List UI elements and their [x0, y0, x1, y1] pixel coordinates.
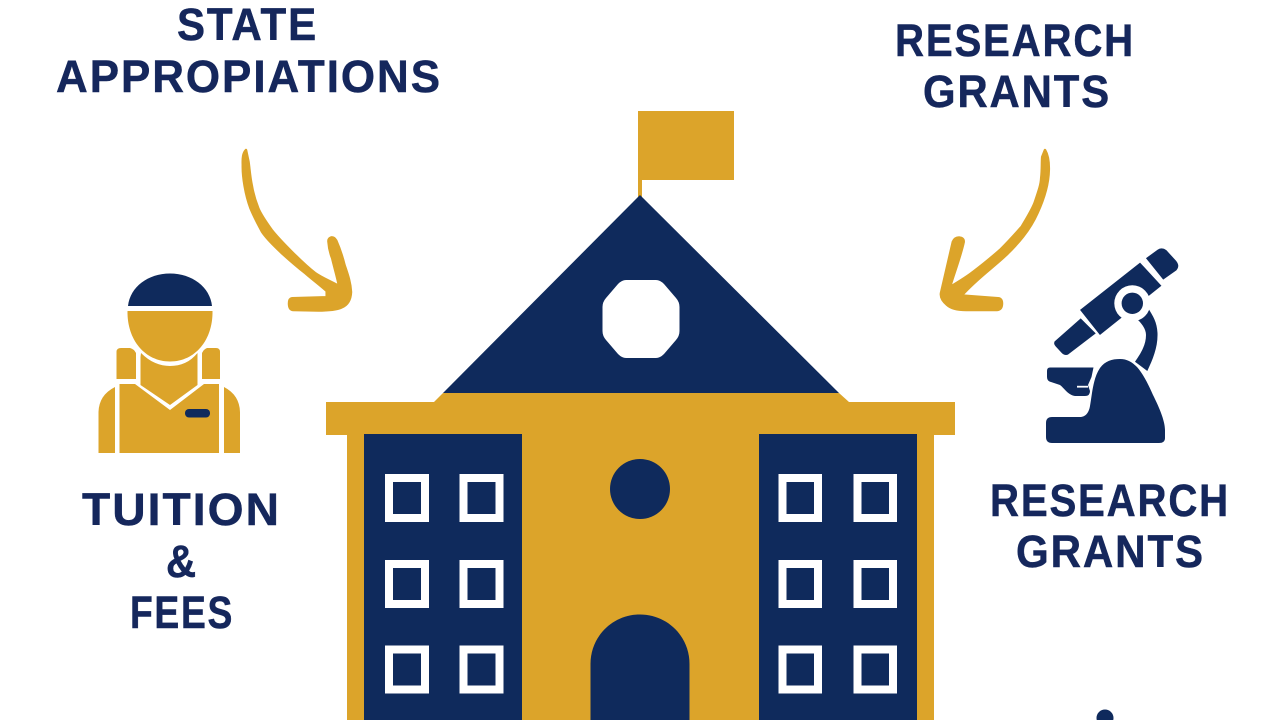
flag	[638, 111, 734, 197]
left wing	[364, 434, 522, 720]
building: university hall	[326, 111, 955, 720]
arm	[1135, 308, 1158, 371]
right wing	[759, 434, 917, 720]
arrow: left curved arrow	[243, 150, 351, 310]
eyepiece	[1147, 249, 1178, 279]
arrow: right curved arrow	[941, 150, 1049, 310]
heading: tuition and fees: TUITION	[82, 484, 281, 535]
cornice and facade	[326, 393, 955, 720]
roof	[443, 195, 839, 393]
badge	[185, 409, 210, 418]
heading: research grants right: GRANTS	[1016, 526, 1205, 577]
heading: state appropriations: APPROPIATIONS	[56, 51, 442, 102]
heading: state appropriations: STATE	[177, 0, 318, 50]
cap	[128, 274, 212, 306]
face	[127, 311, 213, 362]
torso	[120, 384, 219, 453]
icon: microscope	[1046, 249, 1178, 720]
round window	[610, 459, 670, 519]
heading: tuition and fees	[82, 484, 281, 638]
heading: research grants right	[990, 475, 1230, 577]
tube	[1081, 263, 1161, 334]
icon: student figure	[98, 274, 240, 453]
stage	[1047, 368, 1094, 396]
left strap	[116, 348, 136, 379]
heading: research grants top	[895, 15, 1135, 117]
heading: research grants top: RESEARCH	[895, 15, 1135, 66]
partial icon at lower edge	[1096, 710, 1114, 720]
neck and collar	[140, 353, 198, 405]
heading: state appropriations	[56, 0, 442, 102]
heading: research grants top: GRANTS	[923, 66, 1111, 117]
objective	[1055, 319, 1095, 354]
right sleeve	[224, 387, 240, 453]
focus ring	[1114, 285, 1150, 321]
heading: tuition and fees: &	[166, 536, 198, 587]
windows	[389, 478, 893, 690]
roof window	[602, 280, 680, 358]
heading: research grants right: RESEARCH	[990, 475, 1230, 526]
heading: tuition and fees: FEES	[130, 587, 234, 638]
stage highlight	[1077, 386, 1088, 388]
left sleeve	[98, 387, 115, 453]
right strap	[202, 348, 220, 379]
base	[1046, 359, 1165, 443]
door	[590, 614, 690, 720]
